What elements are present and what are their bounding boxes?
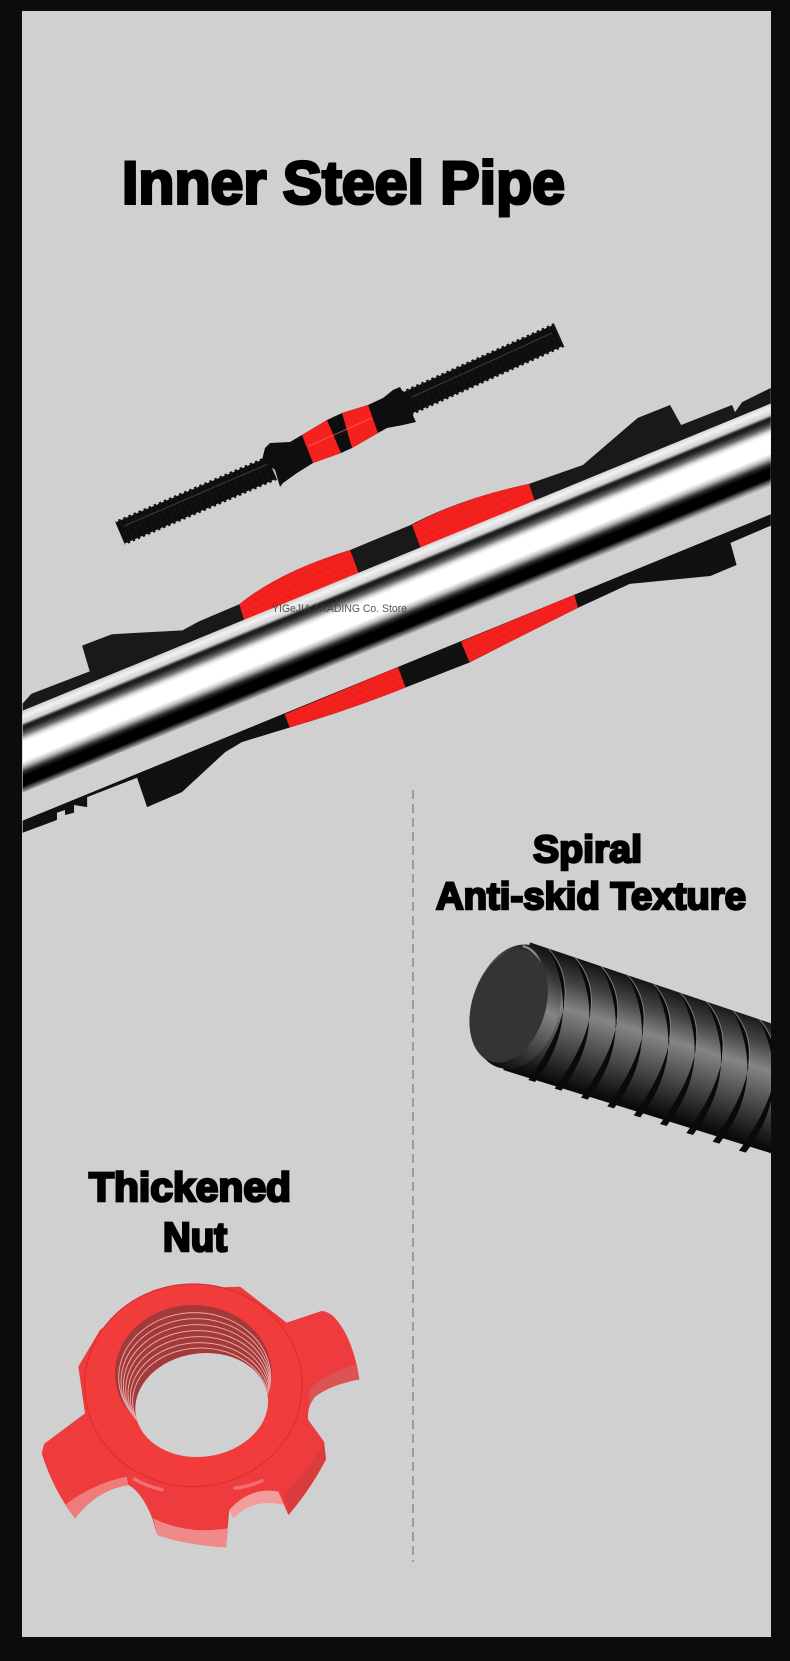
threaded rod illustration [120, 333, 559, 533]
heading: spiral anti-skid texture [436, 829, 746, 918]
steel pipe [23, 404, 771, 793]
heading: thickened nut [89, 1164, 291, 1260]
heading: thickened nut: Nut [163, 1214, 227, 1260]
heading: thickened nut: Thickened [89, 1164, 291, 1210]
title: Inner Steel Pipe [122, 150, 565, 216]
heading: spiral anti-skid texture: Anti-skid Texture [436, 876, 746, 918]
heading: spiral anti-skid texture: Spiral [533, 829, 642, 871]
lower grip sleeve [23, 514, 771, 833]
watermark: YIGeJIA TRADING Co. Store [272, 603, 407, 615]
red nut illustration [42, 1284, 359, 1547]
upper grip sleeve [23, 388, 771, 714]
dashed divider [412, 790, 414, 1562]
screw thread illustration [469, 942, 771, 1154]
